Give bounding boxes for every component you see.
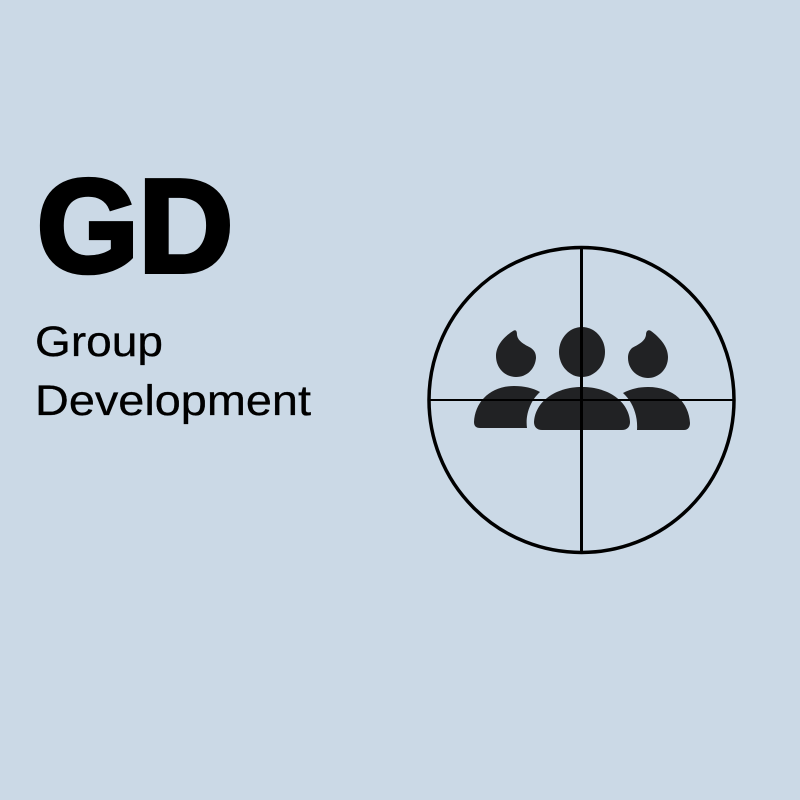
subtitle: Group Development: Group	[35, 318, 163, 366]
crosshair circle	[429, 247, 734, 553]
title: GD: GD	[37, 152, 233, 300]
subtitle: Group Development: Development	[35, 377, 311, 425]
subtitle: Group Development	[35, 318, 311, 425]
icon: left person	[474, 330, 540, 428]
icon: right person	[623, 330, 690, 430]
icon: group of people in crosshair	[474, 327, 690, 430]
icon: centre person	[534, 327, 630, 430]
